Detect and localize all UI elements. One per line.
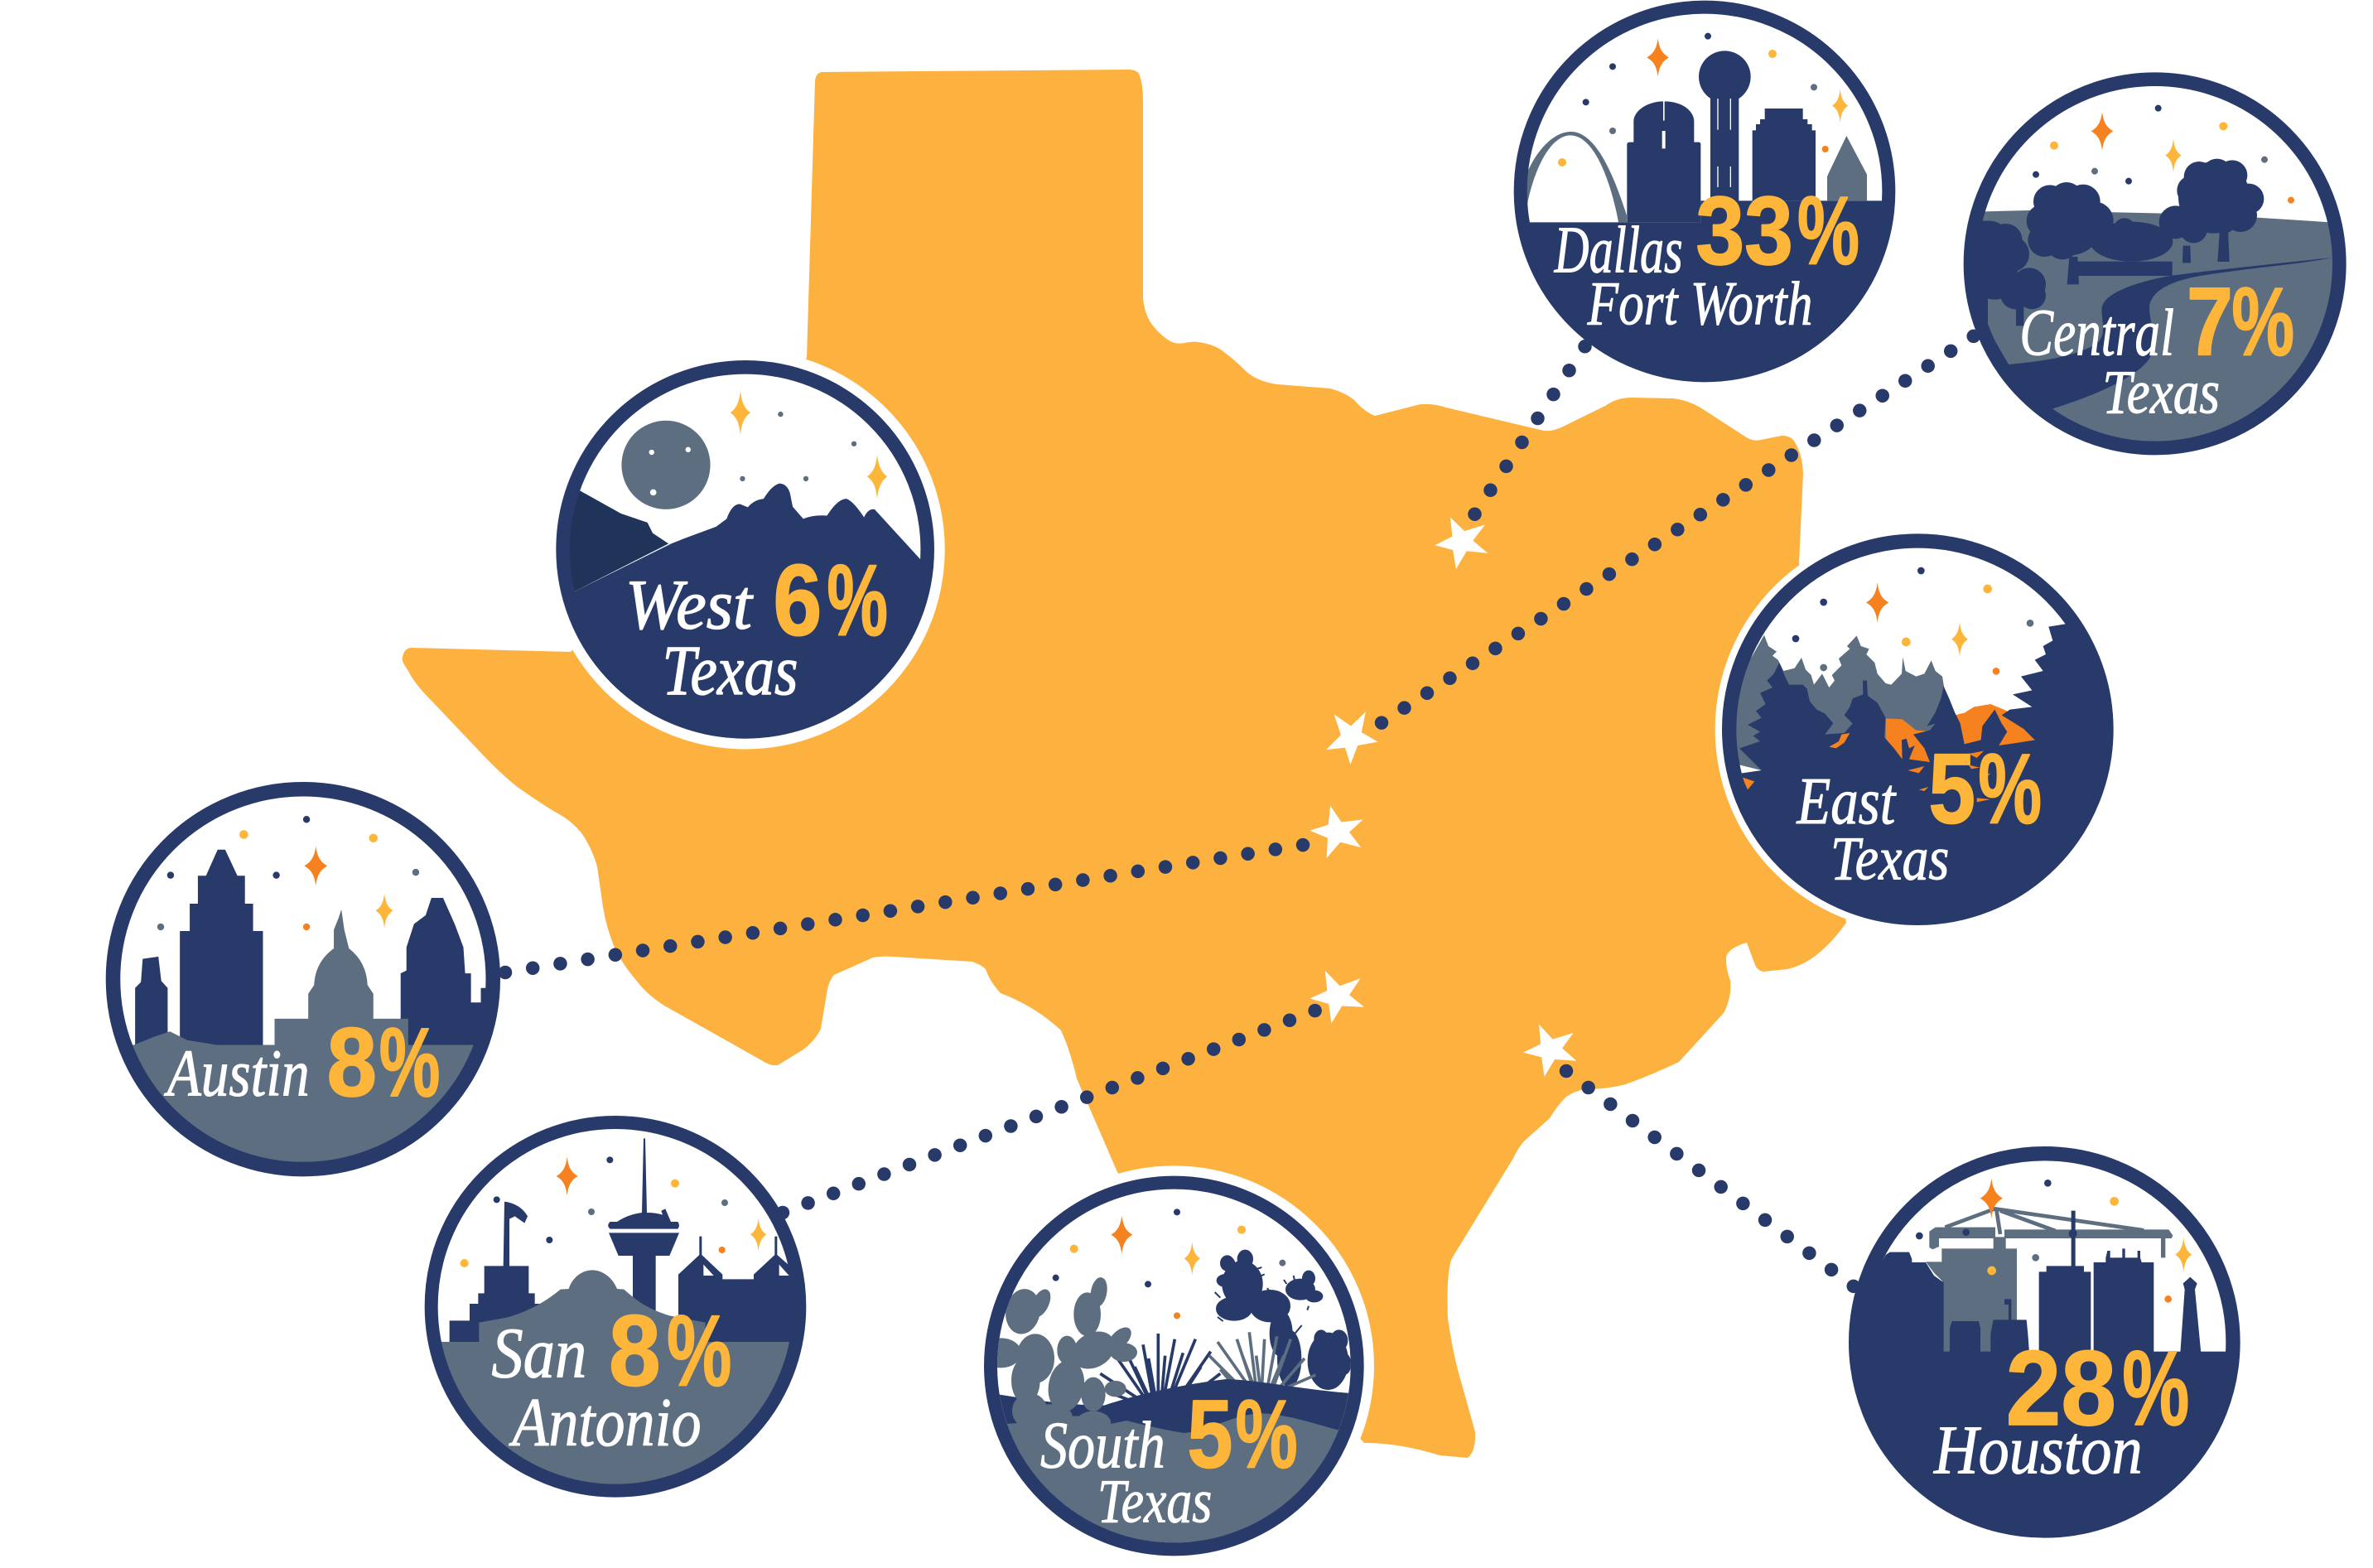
percent: 5%: 5 [1928,733,1975,844]
percent: 28%: 28 [2006,1329,2116,1448]
scene: cacti and agave [997,1209,1351,1542]
label: West Texas: West [625,564,754,644]
scene: moon and mountains [570,391,920,726]
percent: 33%: 33 [1695,176,1793,284]
panel: Houston [1843,1154,2249,1545]
percent: 28% [2006,1329,2189,1448]
label: East: East [1796,765,1897,838]
label line two: Texas [663,630,798,710]
label: Austin: Austin [164,1036,310,1110]
percent: 8% [609,1295,731,1407]
label: Texas line: Texas [1830,825,1949,894]
percent: 8%: 8 [327,1007,377,1117]
label: Houston: Houston [1933,1412,2143,1488]
percent: 6%: 6 [773,544,822,657]
label: Dallas: Dallas [1554,214,1683,287]
connector: Houston [1566,1071,1854,1286]
percent: 8% [327,1007,440,1117]
panel: East Texas [1715,527,2129,932]
percent: 7% [2187,267,2294,375]
percent: 7%: 7 [2187,267,2233,375]
percent: 7%: % [2231,267,2294,375]
percent: 28%: % [2122,1329,2189,1448]
percent: 8%: % [667,1295,731,1407]
prickly pear [997,1277,1137,1425]
panel: West Texas [542,350,945,749]
label: Texas (South): Texas [1097,1467,1212,1536]
connector: Central Texas [1382,336,1974,723]
connector: Dallas Fort Worth [1474,346,1585,514]
percent: 5% (South) [1187,1380,1298,1488]
percent: 5% [1928,733,2042,844]
percent: 5% (South): % [1236,1380,1298,1488]
label: Antonio: Antonio [509,1385,702,1461]
percent: 33%: % [1797,176,1859,284]
map: Texas silhouette [403,70,1846,1458]
agave [1100,1334,1220,1406]
panel: Dallas Fort Worth [1507,7,1905,398]
scene: San Antonio skyline [441,1138,793,1484]
panel: Austin [106,789,501,1203]
label: Central: Central [2019,297,2174,369]
jumping cactus [1215,1251,1350,1389]
scene: forest [1736,567,2099,911]
panel: South Texas [974,1165,1374,1566]
connector: San Antonio [783,1011,1315,1213]
trees [1967,159,2264,326]
scene: Houston port skyline [1863,1178,2226,1524]
label: Fort Worth: Fort Worth [1587,270,1812,339]
label: South: South [1040,1410,1165,1483]
panel: Central Texas [1959,80,2339,458]
percent: 8%: % [379,1007,440,1117]
scene: Austin skyline [133,816,485,1162]
percent: 33% [1695,176,1859,284]
location stars [1309,518,1576,1077]
panel: San Antonio [418,1122,816,1508]
percent: 5% (South): 5 [1187,1380,1232,1488]
percent: 6%: % [827,544,888,657]
connector: Austin [505,845,1304,972]
label: San: San [491,1314,586,1393]
scene: trees and river [1959,105,2334,458]
percent: 8%: 8 [609,1295,661,1407]
percent: 5%: % [1978,733,2042,844]
scene: Dallas skyline [1527,33,1882,369]
label: Texas: Texas [2102,358,2220,427]
percent: 6% [773,544,888,657]
